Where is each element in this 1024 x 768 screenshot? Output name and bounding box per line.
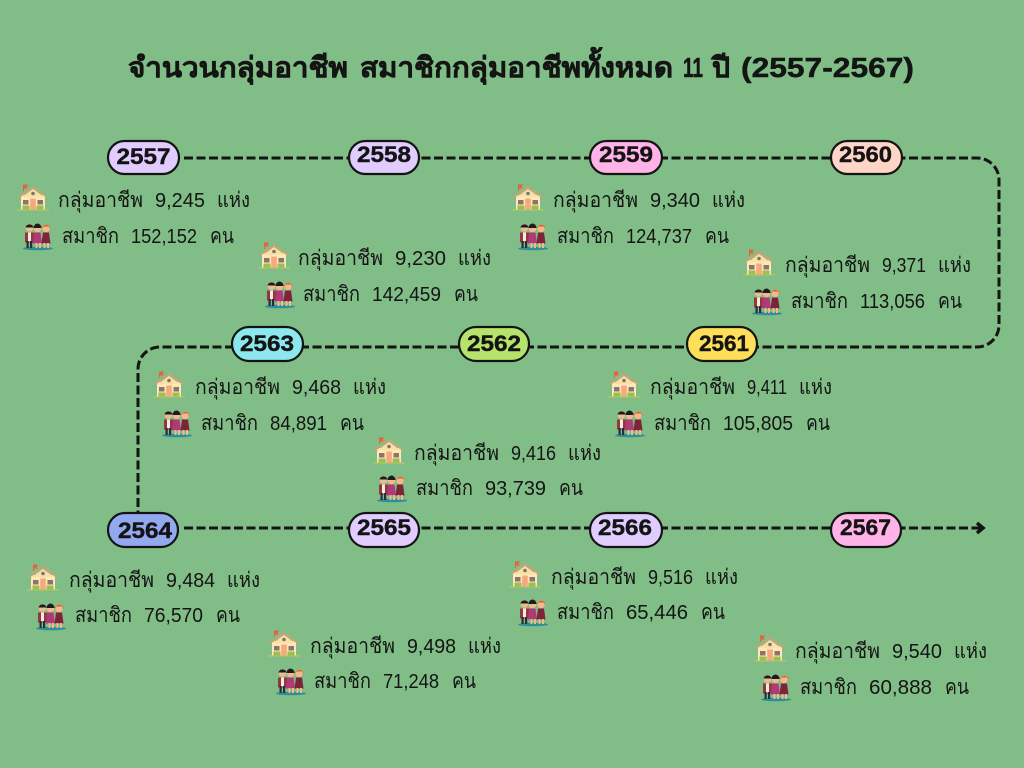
year 2567: กลุ่มอาชีพ [795, 640, 880, 664]
year 2561: 2561 [699, 331, 749, 356]
year 2558: แห่ง [458, 247, 491, 270]
title: 11 [683, 52, 703, 83]
year 2564 [27, 513, 260, 630]
year 2566: 65,446 [626, 602, 688, 624]
year 2558: สมาชิก [303, 283, 360, 306]
year 2564: คน [216, 604, 240, 627]
year 2566: แห่ง [705, 566, 738, 589]
title: สมาชิกกลุ่มอาชีพทั้งหมด [360, 46, 673, 85]
year 2564: 2564 [118, 518, 173, 543]
year 2559: แห่ง [712, 189, 745, 212]
year 2561 [608, 327, 832, 437]
year 2557: แห่ง [217, 189, 250, 212]
year 2560: กลุ่มอาชีพ [785, 254, 870, 278]
year 2557: คน [210, 225, 234, 248]
year 2559: 9,340 [650, 190, 700, 212]
year 2560: 9,371 [882, 255, 926, 277]
year 2563 [153, 327, 386, 437]
year 2562: คน [559, 477, 583, 500]
year 2558: กลุ่มอาชีพ [298, 247, 383, 271]
year 2562: 9,416 [511, 443, 556, 465]
year 2562: 2562 [467, 331, 521, 356]
year 2566: คน [701, 601, 725, 624]
year 2564: 9,484 [166, 570, 215, 592]
year 2565: สมาชิก [314, 670, 371, 693]
arrow head [977, 523, 983, 533]
year 2559: 2559 [599, 142, 653, 167]
year 2563: สมาชิก [201, 412, 258, 435]
year 2557: สมาชิก [62, 225, 119, 248]
year 2566: 9,516 [648, 567, 693, 589]
year 2563: 2563 [240, 331, 294, 356]
year 2562: แห่ง [568, 442, 601, 465]
year 2566 [509, 513, 738, 626]
year 2557: กลุ่มอาชีพ [58, 189, 143, 213]
year 2562 [373, 327, 601, 502]
year 2560: แห่ง [938, 254, 971, 277]
year 2565: 71,248 [383, 671, 439, 693]
year 2565: คน [452, 670, 476, 693]
year 2560: 113,056 [860, 291, 925, 313]
year 2561: 105,805 [723, 413, 793, 435]
year 2560 [743, 141, 971, 315]
year 2558: 9,230 [395, 248, 446, 270]
year 2567: คน [945, 676, 969, 699]
year 2565: กลุ่มอาชีพ [310, 635, 395, 659]
dashed timeline path [138, 158, 999, 528]
year 2559 [512, 141, 745, 250]
year 2566: สมาชิก [557, 601, 614, 624]
title: (2557-2567) [741, 52, 914, 83]
year 2566: กลุ่มอาชีพ [551, 566, 636, 590]
year 2557: 152,152 [131, 226, 197, 248]
year 2561: 9,411 [747, 377, 787, 399]
year 2563: แห่ง [353, 376, 386, 399]
year 2561: สมาชิก [654, 412, 711, 435]
year 2563: คน [340, 412, 364, 435]
year 2558: 2558 [357, 142, 411, 167]
year 2563: 84,891 [270, 413, 327, 435]
title [128, 46, 914, 85]
year 2558 [258, 141, 491, 308]
year 2557: 9,245 [155, 190, 205, 212]
year 2561: คน [806, 412, 830, 435]
year 2558: 142,459 [372, 284, 441, 306]
year 2562: สมาชิก [416, 477, 473, 500]
year 2563: 9,468 [292, 377, 341, 399]
year 2560: คน [938, 290, 962, 313]
year 2565 [268, 513, 501, 695]
year 2562: 93,739 [485, 478, 546, 500]
year 2567 [754, 513, 987, 701]
year 2560: สมาชิก [791, 290, 848, 313]
year 2566: 2566 [598, 515, 652, 540]
year 2559: กลุ่มอาชีพ [553, 189, 638, 213]
title: จำนวนกลุ่มอาชีพ [128, 52, 348, 85]
year 2559: 124,737 [626, 226, 692, 248]
year 2567: 2567 [840, 515, 891, 540]
year 2564: กลุ่มอาชีพ [69, 569, 154, 593]
title: ปี [710, 52, 730, 83]
year 2567: 9,540 [892, 641, 942, 663]
year 2567: สมาชิก [800, 676, 857, 699]
year 2557: 2557 [116, 144, 170, 169]
year 2565: 9,498 [407, 636, 456, 658]
year 2565: 2565 [357, 515, 411, 540]
year 2558: คน [454, 283, 478, 306]
year 2564: แห่ง [227, 569, 260, 592]
year 2559: คน [705, 225, 729, 248]
year 2561: กลุ่มอาชีพ [650, 376, 735, 400]
year 2557 [17, 141, 250, 250]
year 2563: กลุ่มอาชีพ [195, 376, 280, 400]
year 2560: 2560 [839, 142, 892, 167]
year 2559: สมาชิก [557, 225, 614, 248]
year 2564: 76,570 [144, 605, 203, 627]
year 2561: แห่ง [799, 376, 832, 399]
year 2565: แห่ง [468, 635, 501, 658]
year 2567: แห่ง [954, 640, 987, 663]
year 2567: 60,888 [869, 677, 932, 699]
year 2562: กลุ่มอาชีพ [414, 442, 499, 466]
year 2564: สมาชิก [75, 604, 132, 627]
